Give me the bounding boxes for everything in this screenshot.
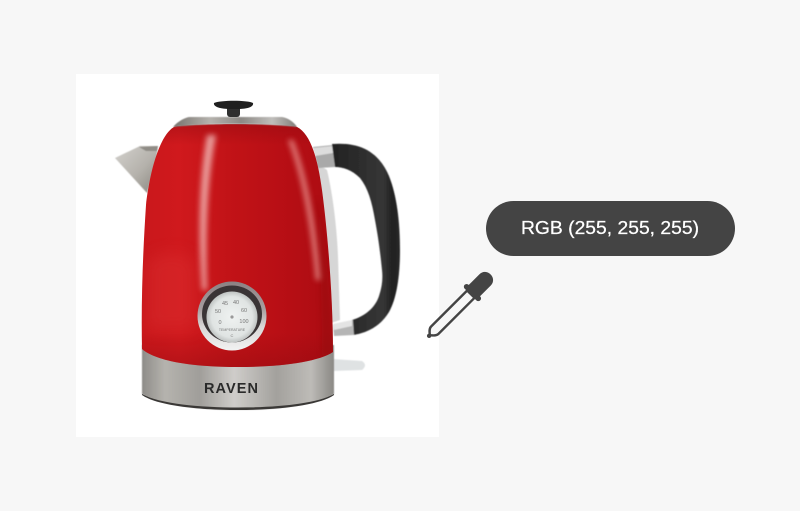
dial scale numbers [215, 300, 249, 338]
kettle base bottom shadow [142, 394, 334, 410]
dial scale numbers: 40 [233, 300, 239, 306]
brand label: RAVEN [204, 381, 258, 397]
dial scale numbers: 100 [239, 319, 249, 325]
red kettle illustration [115, 101, 400, 410]
kettle lid knob [214, 101, 253, 117]
dial scale numbers: 45 [222, 301, 228, 307]
kettle body highlights [146, 135, 334, 355]
thermometer dial [198, 282, 266, 350]
eyedropper icon [420, 267, 498, 345]
white product photo panel [115, 100, 401, 410]
kettle water window [313, 160, 340, 325]
dial scale numbers: TEMPERATURE [219, 328, 246, 332]
dial scale numbers: 60 [241, 308, 247, 314]
RGB value text: RGB (255, 255, 255) [521, 217, 699, 238]
color picker infographic [115, 100, 735, 410]
kettle steel base [142, 345, 334, 410]
kettle handle [313, 144, 400, 336]
dial scale numbers: C [231, 333, 234, 338]
dial scale numbers: 0 [218, 320, 222, 326]
color value label pill [486, 201, 735, 256]
kettle base foot [332, 359, 365, 371]
kettle body [140, 120, 336, 370]
dial scale numbers: 50 [215, 309, 221, 315]
kettle lid [173, 117, 297, 127]
kettle spout [115, 146, 158, 193]
